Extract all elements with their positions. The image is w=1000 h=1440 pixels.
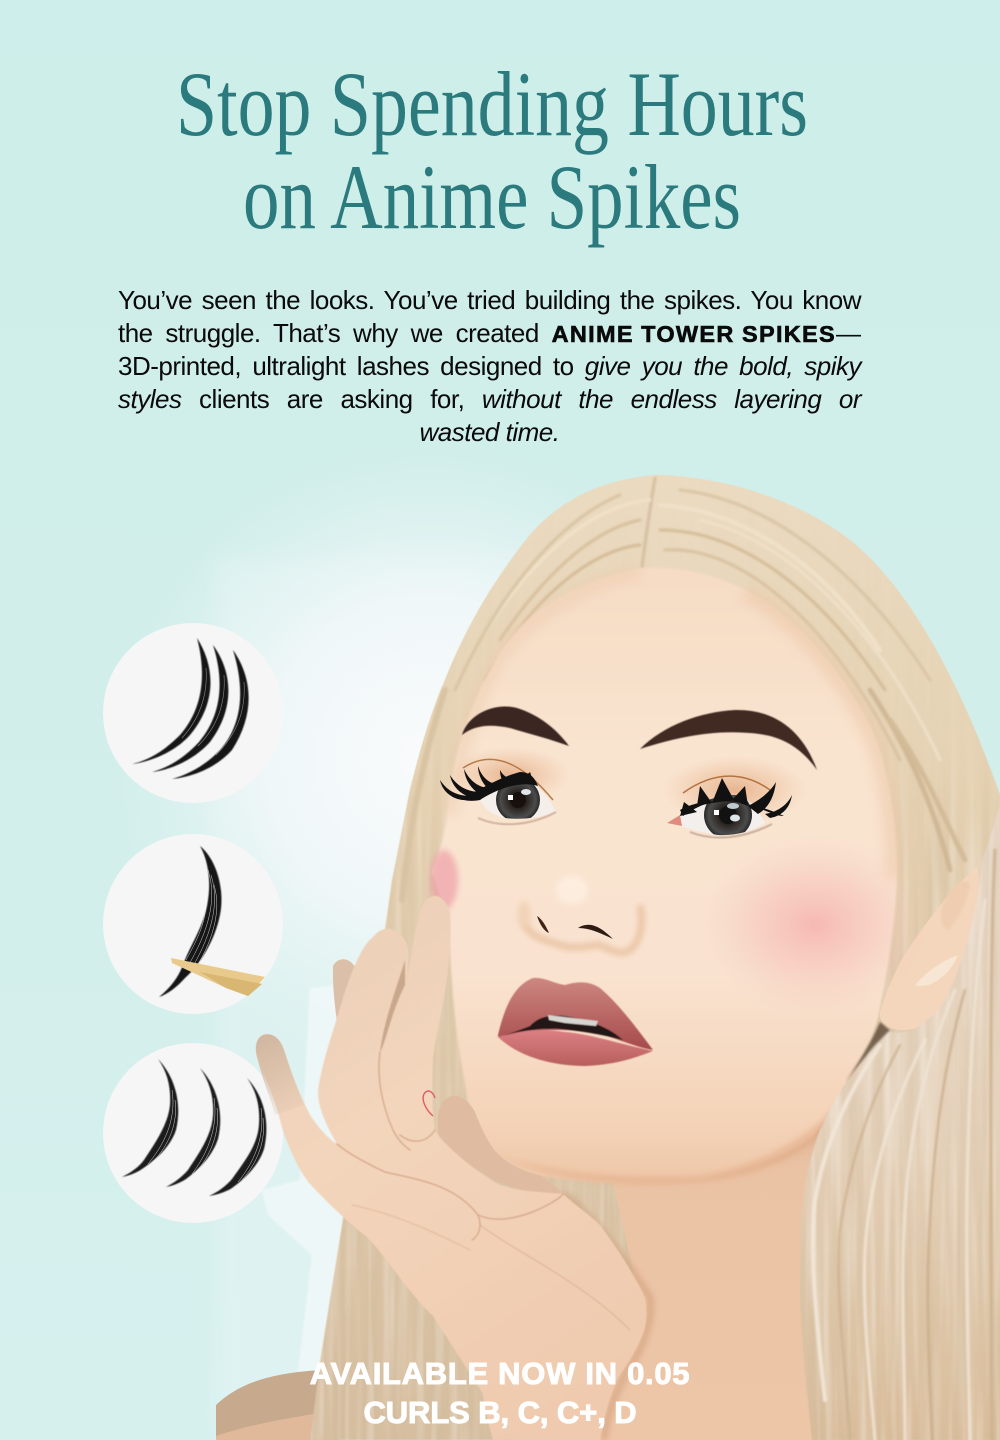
circle: three stacked lash spikes <box>103 623 283 803</box>
eyeshadow right <box>663 756 807 824</box>
body copy: 3D-printed, ultralight lashes designed to give you the bold, spiky <box>118 351 861 381</box>
nose <box>517 876 642 953</box>
heading: on Anime Spikes <box>243 146 741 248</box>
hair parting and top strands <box>402 478 965 900</box>
hand shadow on neck <box>563 1194 650 1440</box>
body copy: the struggle. That’s why we created — <box>118 318 861 348</box>
finger heart tattoo <box>423 1091 435 1116</box>
shoulder <box>216 1370 340 1440</box>
forehead and temple shading <box>450 572 640 815</box>
heading: Stop Spending Hours <box>176 53 808 155</box>
neck <box>590 1090 860 1440</box>
eye left <box>440 759 556 824</box>
ear <box>880 867 979 1030</box>
ring finger <box>333 959 375 1070</box>
pinky nail tone <box>256 1034 304 1115</box>
jaw shading <box>490 1090 850 1184</box>
body copy: styles clients are asking for, without the endless layering or <box>118 384 861 414</box>
finger shadow gap <box>380 960 405 1052</box>
hand <box>256 896 650 1440</box>
panel: white halo behind hand <box>262 985 350 1372</box>
circle: three separate lash spikes <box>103 1043 283 1223</box>
hair: right front strands <box>790 800 1000 1440</box>
forehead right shading <box>745 592 894 880</box>
call to action: CURLS B, C, C+, D <box>363 1394 637 1430</box>
body copy: wasted time. <box>420 417 559 447</box>
eye right <box>667 776 792 839</box>
face <box>430 568 930 1184</box>
body copy: ANIME TOWER SPIKES <box>552 321 836 347</box>
circle: single lash spike held by tweezers <box>103 834 283 1014</box>
heading <box>176 53 808 248</box>
eyebrow right <box>640 710 817 770</box>
eyeshadow left <box>450 747 570 803</box>
finger creases <box>337 1052 630 1330</box>
blush left cheek <box>430 850 458 910</box>
mouth opening and teeth <box>503 1015 623 1040</box>
blush right cheek <box>700 835 930 1015</box>
lash spike <box>159 846 221 997</box>
body copy: You’ve seen the looks. You’ve tried building the spikes. You know <box>118 285 861 315</box>
eyebrow left <box>462 706 569 746</box>
body copy <box>118 285 863 447</box>
lips <box>498 978 653 1066</box>
call to action <box>310 1356 690 1430</box>
palm, pinky, middle and index fingers <box>256 896 646 1440</box>
hair: back mass <box>300 470 1000 1440</box>
call to action: AVAILABLE NOW IN 0.05 <box>310 1356 690 1391</box>
thumb <box>438 1096 565 1195</box>
lashes right <box>680 778 792 818</box>
tweezers <box>171 958 265 996</box>
lashes left <box>440 766 538 801</box>
